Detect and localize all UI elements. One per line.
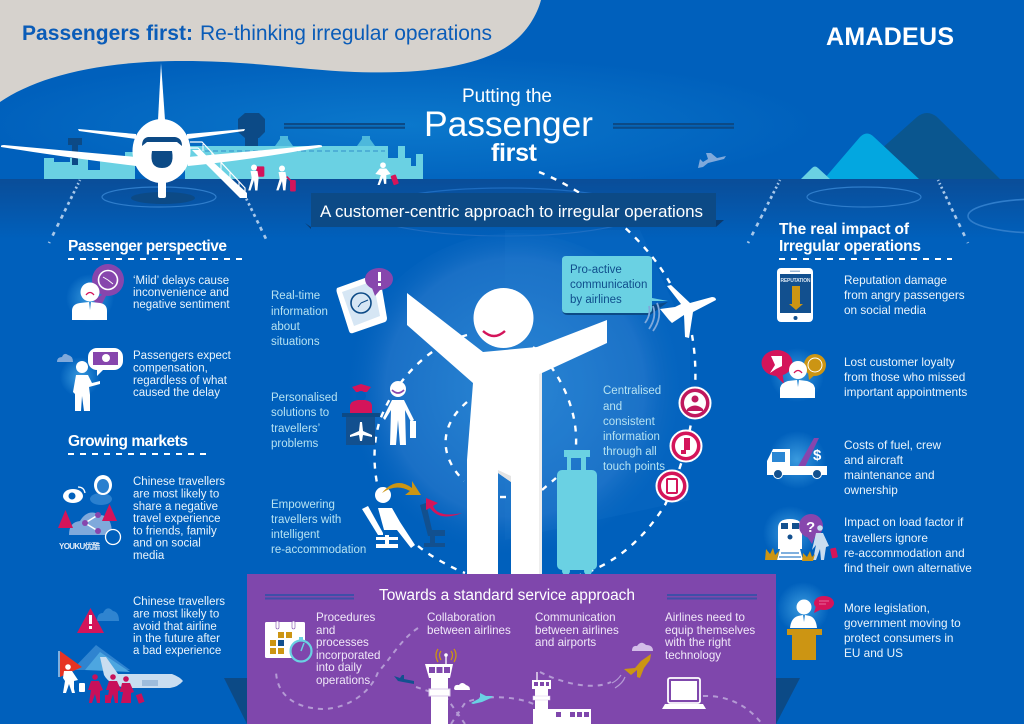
text: reputation damage: Reputation damage (844, 273, 947, 287)
text: avoid airline: in the future after (133, 633, 220, 645)
text: costs: Costs of fuel, crew (844, 438, 942, 452)
text: centralised information: consistent (603, 416, 656, 428)
text: real-time information: information (271, 306, 328, 318)
text: mild delays: inconvenience and (133, 287, 229, 299)
icon: tablet with alert (336, 268, 393, 333)
text: reputation damage (844, 273, 965, 317)
text: technology: Airlines need to (665, 611, 745, 624)
text: procedures: incorporated (316, 649, 380, 662)
panel rules (265, 594, 757, 600)
icon: avoid airline (59, 608, 183, 704)
text: real-time information (271, 290, 328, 348)
icon: distant plane (698, 153, 726, 168)
text: load factor (844, 515, 972, 575)
title: putting the passenger first: Passenger (424, 104, 593, 144)
text: technology: equip themselves (665, 624, 755, 637)
title: header: Re-thinking irregular operations (200, 22, 492, 45)
ground ellipses (102, 187, 1024, 236)
text: centralised information: through all (603, 446, 657, 458)
icon: laptop (662, 678, 706, 709)
text: costs: ownership (844, 483, 898, 497)
text: compensation: caused the delay (133, 387, 220, 399)
text: share negative experience: travel experience (133, 513, 221, 525)
text: compensation (133, 350, 232, 399)
boarding passengers (248, 162, 399, 192)
icon: train alternative: ? (806, 519, 815, 536)
text: reputation damage: from angry passengers (844, 288, 965, 302)
text: mild delays (133, 275, 230, 311)
text: empowering travellers: Empowering (271, 499, 335, 511)
icon: passenger expects compensation (57, 348, 123, 411)
banner (305, 193, 724, 229)
banner: A customer-centric approach to irregular operations (320, 202, 703, 221)
icon: reputation phone (777, 268, 813, 322)
text: personalised solutions: problems (271, 438, 319, 450)
hero passenger figure (407, 288, 607, 575)
text: share negative experience: are most likely to (133, 488, 219, 500)
text: real-time information: Real-time (271, 290, 320, 302)
text: communication: and airports (535, 636, 596, 649)
text: collaboration: Collaboration (427, 611, 495, 624)
icon: chinese social media (58, 475, 120, 551)
text: avoid airline: are most likely to (133, 608, 219, 620)
text: empowering travellers: re-accommodation (271, 544, 366, 556)
text: technology (664, 611, 755, 662)
text: share negative experience: share a negative (133, 501, 218, 513)
text: avoid airline: Chinese travellers (133, 596, 225, 608)
text: procedures (316, 611, 380, 687)
title rules (284, 123, 734, 129)
text: legislation: More legislation, (844, 601, 930, 615)
text: mild delays: negative sentiment (133, 299, 230, 311)
text: communication: Communication (535, 611, 616, 624)
icon: seat re-accommodation (362, 481, 462, 548)
text: compensation: regardless of what (133, 375, 228, 387)
text: communication: between airlines (535, 624, 619, 637)
text: procedures: Procedures (316, 611, 375, 624)
icon: smiling traveller (383, 381, 416, 445)
aircraft front view (1, 63, 322, 204)
section: real impact heading: The real impact of (779, 221, 910, 238)
text: load factor: travellers ignore (844, 531, 928, 545)
icon: gold plane with cloud (612, 643, 653, 688)
text: personalised solutions: travellers’ (271, 423, 320, 435)
text: reputation damage: on social media (844, 303, 926, 317)
title: header (22, 22, 492, 45)
title: putting the passenger first: first (491, 139, 538, 167)
icon: calendar and stopwatch (265, 621, 312, 662)
section: real impact heading: Irregular operations (779, 238, 921, 255)
text: legislation: protect consumers in (844, 631, 954, 645)
text: technology: with the right (664, 636, 732, 649)
icon: lost loyalty (762, 348, 826, 402)
callout: pro-active communication (562, 256, 668, 315)
text: personalised solutions (271, 392, 337, 450)
text: compensation: compensation, (133, 362, 208, 374)
text: centralised information: and (603, 401, 622, 413)
text: legislation (844, 601, 961, 660)
icon: airline agent at desk (342, 384, 380, 445)
runway markers (49, 180, 968, 243)
text: centralised information: touch points (603, 461, 665, 473)
title: putting the passenger first (424, 86, 593, 167)
text: legislation: EU and US (844, 646, 903, 660)
text: real-time information: about (271, 321, 301, 333)
text: lost customer loyalty: from those who missed (844, 370, 965, 384)
icon: blue planes (394, 675, 493, 704)
panel fold shadows (224, 678, 800, 724)
section: growing markets heading: Growing markets (68, 433, 188, 450)
text: lost customer loyalty: important appointments (844, 385, 967, 399)
dashed journey path (374, 172, 695, 575)
terminal building (44, 113, 423, 179)
text: personalised solutions: Personalised (271, 392, 337, 404)
icon: cost truck: $ (813, 447, 822, 464)
text: centralised information (603, 385, 665, 473)
text: real-time information: situations (271, 336, 320, 348)
icon: chinese social media: YOUKU优酷 (59, 541, 100, 551)
sky glow (0, 55, 820, 195)
text: procedures: into daily (316, 661, 362, 674)
text: personalised solutions: solutions to (271, 407, 329, 419)
callout: pro-active communication: by airlines (570, 294, 622, 306)
text: empowering travellers: travellers with (271, 514, 341, 526)
ground band (0, 179, 1024, 239)
text: avoid airline: a bad experience (133, 645, 221, 657)
callout: pro-active communication: Pro-active (570, 264, 622, 276)
text: avoid airline (133, 596, 225, 657)
text: share negative experience: and on social (133, 538, 201, 550)
text: load factor: Impact on load factor if (844, 515, 964, 529)
icon: train alternative (763, 506, 838, 561)
suitcase (557, 450, 597, 575)
section: real impact heading (779, 221, 952, 259)
text: lost customer loyalty: Lost customer loyalty (844, 355, 955, 369)
text: avoid airline: avoid that airline (133, 621, 217, 633)
icon: airport terminal (532, 672, 591, 724)
text: share negative experience: to friends, family (133, 526, 217, 538)
text: load factor: find their own alternative (844, 561, 972, 575)
text: procedures: processes (316, 636, 369, 649)
mountains (801, 113, 1000, 179)
icon: delayed passenger (66, 264, 124, 322)
text: communication (535, 611, 619, 649)
icon: reputation phone: REPUTATION (780, 278, 811, 284)
text: costs (844, 438, 942, 497)
callout: pro-active communication: communication (570, 279, 647, 291)
text: empowering travellers: intelligent (271, 529, 320, 541)
text: procedures: operations (316, 674, 370, 687)
icon: control tower (425, 649, 470, 724)
central glow (343, 233, 687, 577)
text: centralised information: Centralised (603, 385, 661, 397)
panel beam (505, 230, 690, 540)
icon: plane with signal (645, 285, 716, 338)
text: share negative experience (133, 476, 225, 562)
text: costs: and aircraft (844, 453, 904, 467)
panel heading: Towards a standard service approach (379, 587, 635, 604)
text: centralised information: information (603, 431, 660, 443)
text: procedures: and (316, 624, 335, 637)
icon: cost truck (767, 431, 827, 489)
logo: Amadeus: AMADEUS (826, 23, 954, 51)
header shape (0, 0, 541, 102)
text: mild delays: ‘Mild’ delays cause (133, 275, 229, 287)
text: legislation: government moving to (844, 616, 961, 630)
text: collaboration (427, 611, 511, 637)
text: costs: maintenance and (844, 468, 935, 482)
text: compensation: Passengers expect (133, 350, 232, 362)
title: putting the passenger first: Putting the (462, 86, 552, 107)
panel dashed routes (276, 628, 762, 724)
text: technology: technology (665, 649, 721, 662)
icon: touch points (656, 388, 710, 502)
icon: legislator at podium (777, 582, 834, 660)
text: collaboration: between airlines (427, 624, 511, 637)
text: lost customer loyalty (844, 355, 967, 399)
text: empowering travellers (271, 499, 366, 556)
section: passenger perspective heading: Passenger perspective (68, 238, 227, 255)
text: share negative experience: media (133, 550, 165, 562)
text: share negative experience: Chinese travellers (133, 476, 225, 488)
title: header: Passengers first: (22, 22, 193, 45)
panel: standard service approach (247, 574, 776, 724)
text: load factor: re-accommodation and (844, 546, 965, 560)
